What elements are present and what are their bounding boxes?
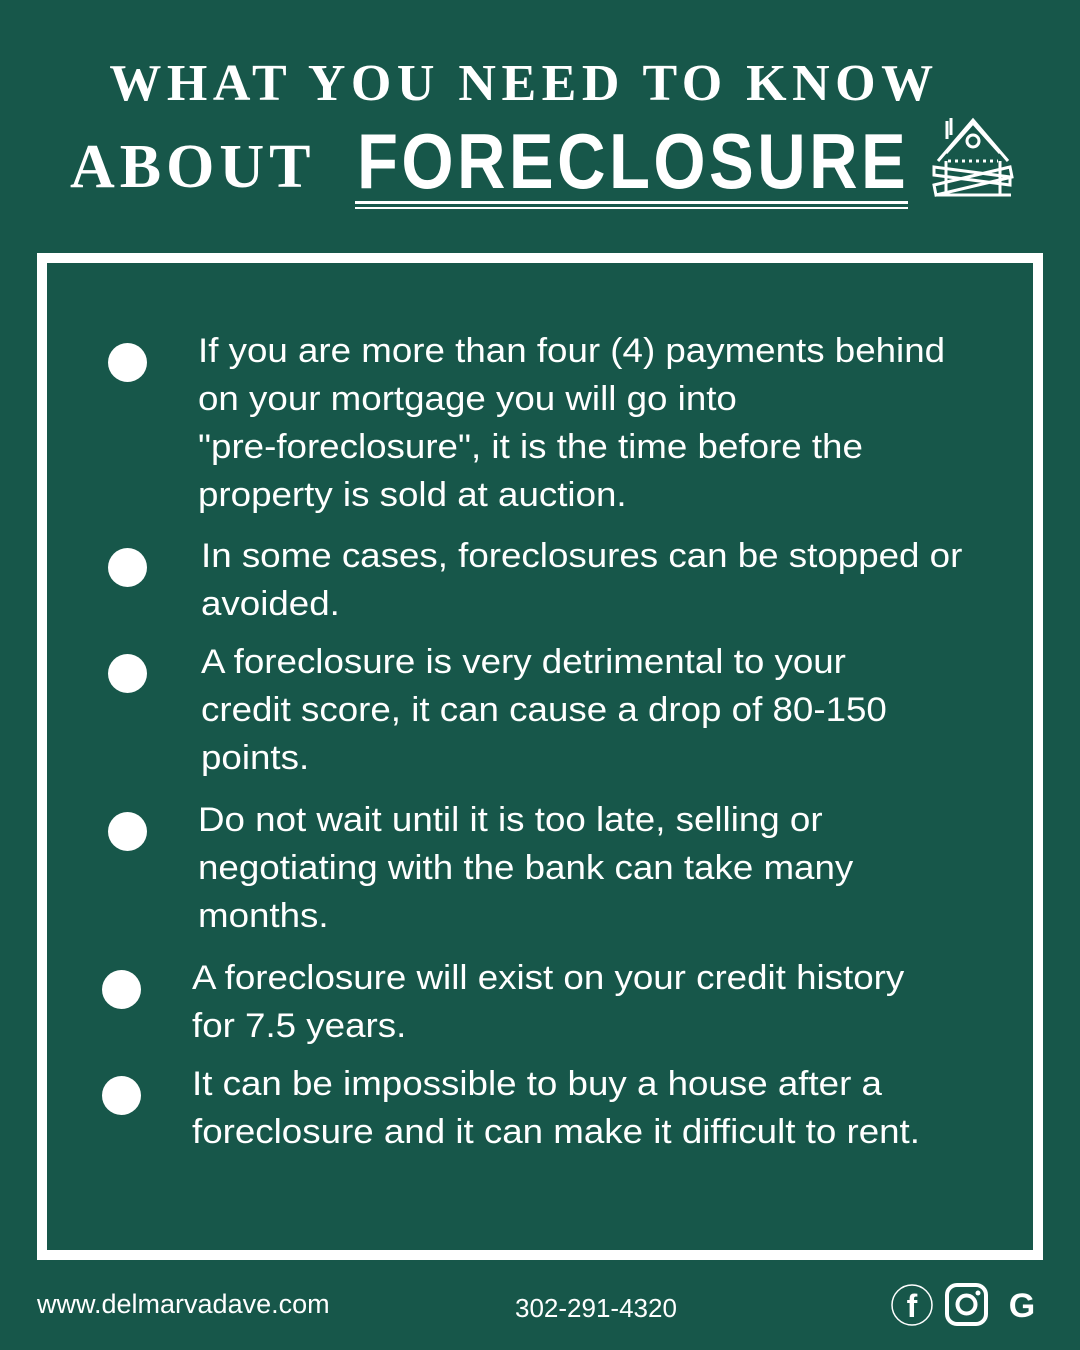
text 5: A foreclosure will exist on your credit history: [192, 959, 904, 997]
panel: facts: [37, 253, 1043, 1260]
text 1: "pre-foreclosure", it is the time before the: [198, 428, 863, 466]
text 2: avoided.: [201, 585, 340, 623]
text 4: months.: [198, 897, 329, 935]
footer phone: 302-291-4320: [515, 1293, 677, 1323]
social icons: G: [1009, 1287, 1035, 1325]
text 3: credit score, it can cause a drop of 80-150: [201, 691, 887, 729]
icon: boarded house: [932, 118, 1014, 197]
social icons: f: [907, 1288, 918, 1324]
text 5: for 7.5 years.: [192, 1007, 406, 1045]
text 4: [198, 801, 854, 935]
bullet 6: [102, 1076, 141, 1115]
bullet 2: [108, 548, 147, 587]
text 4: negotiating with the bank can take many: [198, 849, 853, 887]
text 1: [198, 332, 945, 514]
text 1: on your mortgage you will go into: [198, 380, 737, 418]
text 6: foreclosure and it can make it difficult to rent.: [192, 1113, 920, 1151]
bullet 5: [102, 970, 141, 1009]
text 1: If you are more than four (4) payments behind: [198, 332, 945, 370]
text 3: points.: [201, 739, 309, 777]
text 3: A foreclosure is very detrimental to your: [201, 643, 846, 681]
text 2: [201, 537, 962, 623]
text 6: [192, 1065, 920, 1151]
social icons: [891, 1283, 1035, 1326]
footer website: www.delmarvadave.com: [37, 1289, 330, 1319]
title: about: ABOUT: [70, 133, 315, 201]
title underline: [355, 201, 908, 209]
text 5: [192, 959, 904, 1045]
title: foreclosure: FORECLOSURE: [357, 117, 909, 205]
bullet 1: [108, 343, 147, 382]
text 1: property is sold at auction.: [198, 476, 627, 514]
text 4: Do not wait until it is too late, selling or: [198, 801, 823, 839]
bullet 3: [108, 654, 147, 693]
text 6: It can be impossible to buy a house after a: [192, 1065, 882, 1103]
text 2: In some cases, foreclosures can be stopped or: [201, 537, 962, 575]
bullet 4: [108, 812, 147, 851]
title line 1: WHAT YOU NEED TO KNOW: [109, 55, 939, 112]
text 3: [201, 643, 887, 777]
